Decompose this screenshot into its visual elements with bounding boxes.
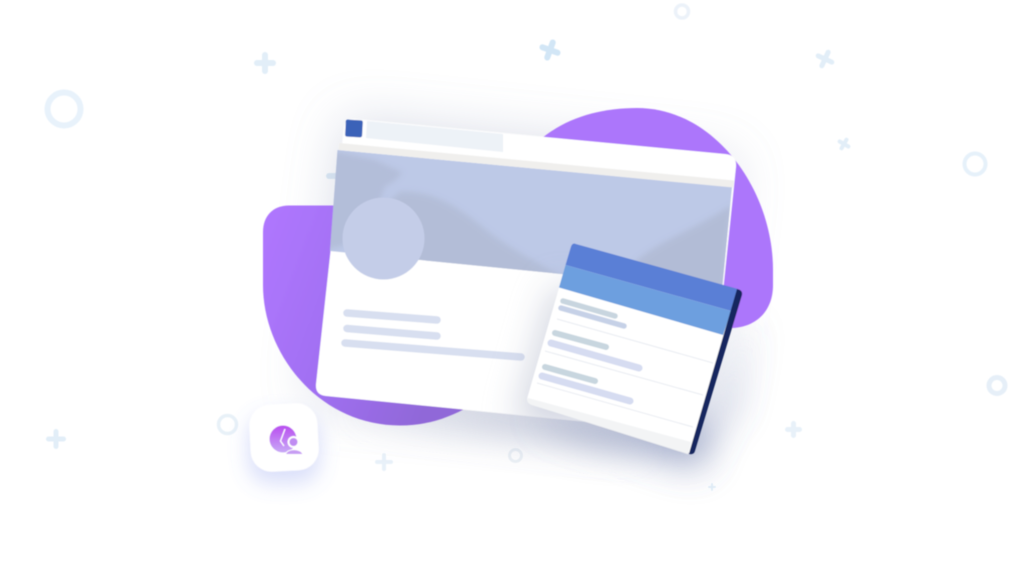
popup card	[527, 244, 742, 454]
search bar	[366, 121, 503, 152]
popup row 1	[561, 301, 624, 326]
popup body	[527, 244, 737, 453]
shade near popup	[506, 278, 582, 422]
popup row 3	[542, 367, 630, 401]
purple blob: left	[263, 206, 470, 426]
name line	[347, 313, 437, 320]
popup header light band	[559, 265, 731, 335]
popup navy side edge	[689, 289, 742, 454]
subtitle line	[347, 328, 437, 336]
icon tile	[248, 402, 320, 484]
purple blob: right	[540, 108, 773, 328]
icon: clock and person	[270, 426, 303, 454]
popup dividers	[537, 319, 713, 427]
popup row 2	[551, 333, 639, 368]
main profile card	[316, 119, 740, 435]
soft shadows	[310, 120, 755, 470]
profile circle	[342, 198, 424, 280]
popup header dark band	[566, 244, 738, 311]
popup footer strip	[528, 398, 691, 454]
illustration	[44, 3, 1008, 492]
logo square	[345, 120, 363, 137]
card body	[316, 119, 736, 427]
cover image	[330, 150, 732, 286]
beige strip under header	[338, 143, 734, 188]
description line	[345, 343, 521, 357]
decorative plus and ring markers	[46, 5, 1005, 491]
